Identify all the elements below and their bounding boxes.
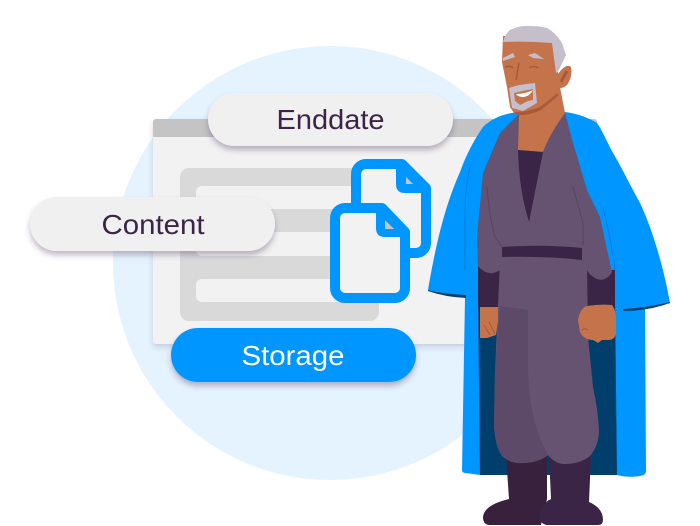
face <box>502 36 560 113</box>
icon: back document <box>356 164 426 253</box>
trouser leg shade <box>494 306 548 463</box>
pill: Content: Content <box>102 209 205 240</box>
pill: Enddate: Enddate <box>276 104 384 135</box>
panel: browser window <box>153 119 597 344</box>
cuffs <box>478 262 501 307</box>
boots <box>483 455 547 525</box>
pill: Storage: Storage <box>242 340 344 371</box>
belt <box>502 246 582 260</box>
ear <box>558 66 572 88</box>
ear shade <box>561 71 567 82</box>
trousers <box>494 262 599 464</box>
robe creases <box>487 187 583 247</box>
pill: Content <box>30 197 275 251</box>
cape creases <box>465 167 615 270</box>
character: man in blue cape <box>428 26 670 525</box>
cape silhouette <box>428 112 670 477</box>
undershirt <box>518 150 543 222</box>
neck and chest <box>515 60 565 152</box>
pill: Storage <box>171 328 416 382</box>
torso robe <box>477 113 612 280</box>
jaw shade <box>514 93 558 115</box>
eyes and nose <box>505 63 538 80</box>
pill: Enddate <box>208 93 453 146</box>
smile <box>516 90 533 97</box>
icon: front document <box>335 208 405 298</box>
hand left <box>480 307 498 338</box>
hair <box>503 26 566 73</box>
beard <box>509 83 537 111</box>
cape lining <box>478 300 617 475</box>
eyebrows <box>503 53 544 61</box>
content block <box>180 168 379 321</box>
sleeve hems <box>428 290 466 298</box>
background circle <box>113 46 547 480</box>
hand right <box>578 305 616 343</box>
